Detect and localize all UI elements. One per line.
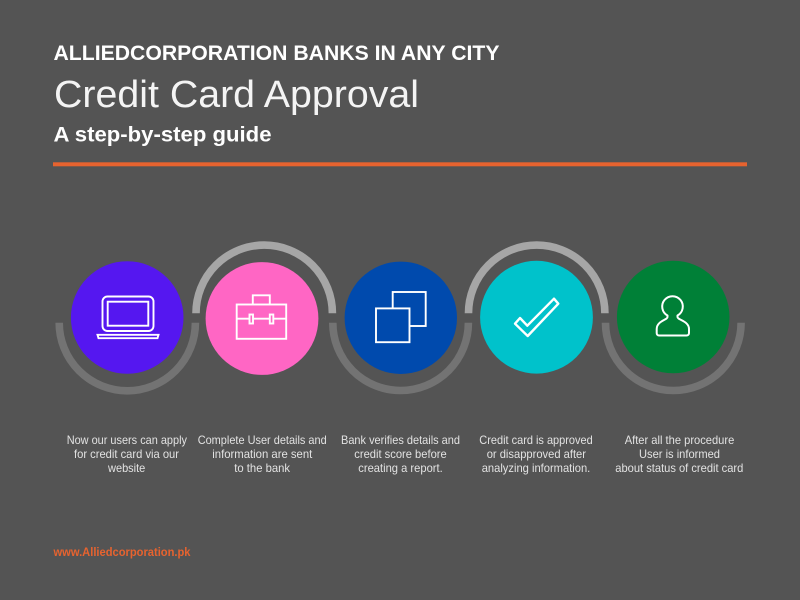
icon: briefcase (237, 295, 286, 339)
heading: organisation: ALLIEDCORPORATION BANKS IN ANY CITY (54, 42, 500, 65)
description: analyzing information. (482, 461, 590, 475)
icon: laptop (98, 296, 158, 338)
title: Credit Card Approval (54, 74, 419, 116)
icon: overlapping squares (376, 292, 426, 342)
arc: bottom (59, 323, 195, 391)
description (479, 433, 593, 475)
description: to the bank (234, 461, 291, 475)
icon: check mark (515, 299, 558, 336)
description: for credit card via our (74, 447, 179, 461)
description: credit score before (354, 447, 447, 461)
step 4: approval (468, 245, 605, 475)
step 2: details sent (196, 245, 332, 475)
step 5: user informed (606, 261, 743, 475)
description (341, 433, 460, 475)
arc: top (196, 245, 332, 313)
description: website (107, 461, 146, 475)
subtitle: A step-by-step guide (54, 124, 272, 146)
header rule (53, 162, 747, 166)
description: Bank verifies details and (341, 433, 460, 447)
description: information are sent (212, 447, 313, 461)
description: Now our users can apply (67, 433, 187, 447)
circle: blue (345, 262, 457, 374)
footer link: www.Alliedcorporation.pk (53, 547, 191, 559)
description (67, 433, 187, 475)
step 1: apply (59, 261, 195, 475)
step 3: bank verification (333, 262, 468, 475)
circle: purple (71, 261, 184, 374)
circle: pink (206, 262, 318, 375)
description (198, 433, 327, 475)
description: After all the procedure (625, 433, 735, 447)
description: creating a report. (358, 461, 443, 475)
description (615, 433, 743, 475)
description: Credit card is approved (479, 433, 593, 447)
circle: green (617, 261, 730, 373)
arc: top (468, 245, 605, 313)
arc: bottom (606, 323, 741, 390)
arc: bottom (333, 323, 468, 390)
description: about status of credit card (615, 461, 743, 475)
description: or disapproved after (487, 447, 586, 461)
description: User is informed (639, 447, 720, 461)
circle: teal (480, 261, 593, 374)
header (53, 42, 747, 166)
icon: person (657, 296, 689, 336)
description: Complete User details and (198, 433, 327, 447)
